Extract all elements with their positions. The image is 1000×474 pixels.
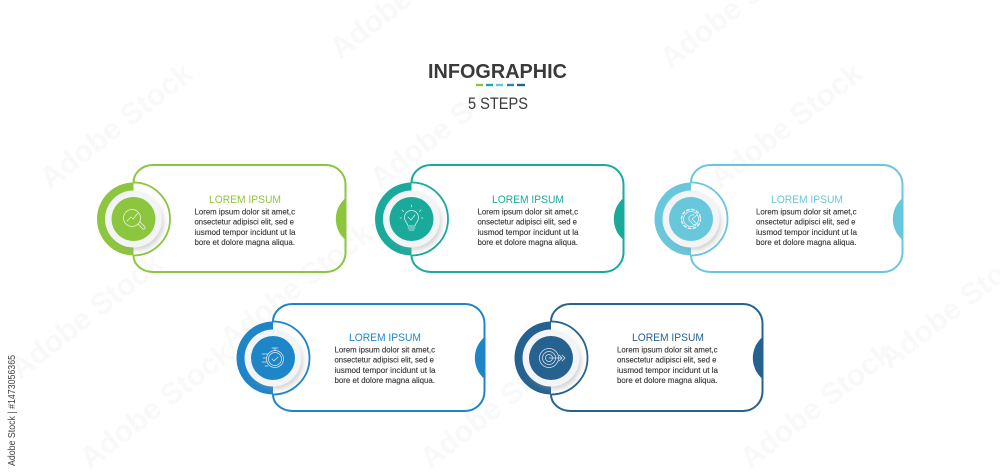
step 3 text: Lorem ipsum dolor sit amet,c bbox=[756, 206, 857, 216]
step 2 heading: LOREM IPSUM bbox=[492, 194, 564, 206]
step 5 text bbox=[617, 344, 718, 385]
step 1 text: iusmod tempor incidunt ut la bbox=[194, 227, 296, 237]
step 2 text bbox=[478, 206, 579, 247]
step 4 text: Lorem ipsum dolor sit amet,c bbox=[334, 344, 436, 354]
step 5 text: onsectetur adipisci elit, sed e bbox=[617, 354, 717, 364]
title colour dashes bbox=[476, 84, 525, 86]
step 4 text: bore et dolore magna aliqua. bbox=[334, 375, 435, 385]
side credit text: Adobe Stock | #1473056365 bbox=[7, 355, 18, 466]
panel: step 2 bbox=[375, 165, 624, 272]
step 2 text: onsectetur adipisci elit, sed e bbox=[478, 216, 577, 226]
step 5 heading: LOREM IPSUM bbox=[632, 332, 704, 344]
step 4 text bbox=[334, 344, 436, 385]
step 3 text bbox=[756, 206, 857, 247]
step 1 text: bore et dolore magna aliqua. bbox=[194, 237, 295, 247]
step 3 text: bore et dolore magna aliqua. bbox=[756, 237, 856, 247]
step 1 text: Lorem ipsum dolor sit amet,c bbox=[194, 206, 296, 216]
step 3 text: iusmod tempor incidunt ut la bbox=[756, 227, 857, 237]
icon: gear with wrench bbox=[682, 210, 700, 228]
panel: step 1 bbox=[97, 165, 345, 272]
step 2 text: iusmod tempor incidunt ut la bbox=[478, 227, 579, 237]
watermark: Adobe Stock bbox=[734, 336, 899, 474]
watermark: Adobe Stock bbox=[34, 56, 199, 196]
step 3 text: onsectetur adipisci elit, sed e bbox=[756, 216, 856, 226]
watermark: Adobe Stock bbox=[364, 56, 529, 196]
watermark: Adobe Stock bbox=[214, 216, 379, 356]
watermark: Adobe Stock bbox=[704, 56, 869, 196]
subtitle: 5 STEPS bbox=[468, 95, 528, 113]
step 5 text: bore et dolore magna aliqua. bbox=[617, 375, 718, 385]
step 4 text: onsectetur adipisci elit, sed e bbox=[334, 354, 434, 364]
watermark: Adobe Stock bbox=[4, 246, 169, 386]
step 4 text: iusmod tempor incidunt ut la bbox=[334, 365, 436, 375]
icon: magnifier with chart bbox=[124, 210, 145, 229]
panel: step 3 bbox=[654, 165, 902, 272]
icon: stopwatch bbox=[262, 348, 284, 368]
icon: target with arrow bbox=[540, 348, 565, 368]
panel: step 4 bbox=[236, 304, 484, 411]
step 1 text bbox=[194, 206, 296, 247]
step 1 heading: LOREM IPSUM bbox=[209, 194, 281, 206]
step 4 heading: LOREM IPSUM bbox=[349, 332, 421, 344]
step 3 heading: LOREM IPSUM bbox=[771, 194, 843, 206]
title: INFOGRAPHIC bbox=[428, 61, 567, 83]
step 2 text: bore et dolore magna aliqua. bbox=[478, 237, 578, 247]
watermark: Adobe Stock bbox=[414, 336, 579, 474]
step 5 text: iusmod tempor incidunt ut la bbox=[617, 365, 718, 375]
step 2 text: Lorem ipsum dolor sit amet,c bbox=[478, 206, 579, 216]
icon: light bulb bbox=[400, 205, 423, 230]
panel: step 5 bbox=[514, 304, 762, 411]
watermark: Adobe Stock bbox=[74, 336, 239, 474]
step 1 text: onsectetur adipisci elit, sed e bbox=[194, 216, 294, 226]
step 5 text: Lorem ipsum dolor sit amet,c bbox=[617, 344, 718, 354]
